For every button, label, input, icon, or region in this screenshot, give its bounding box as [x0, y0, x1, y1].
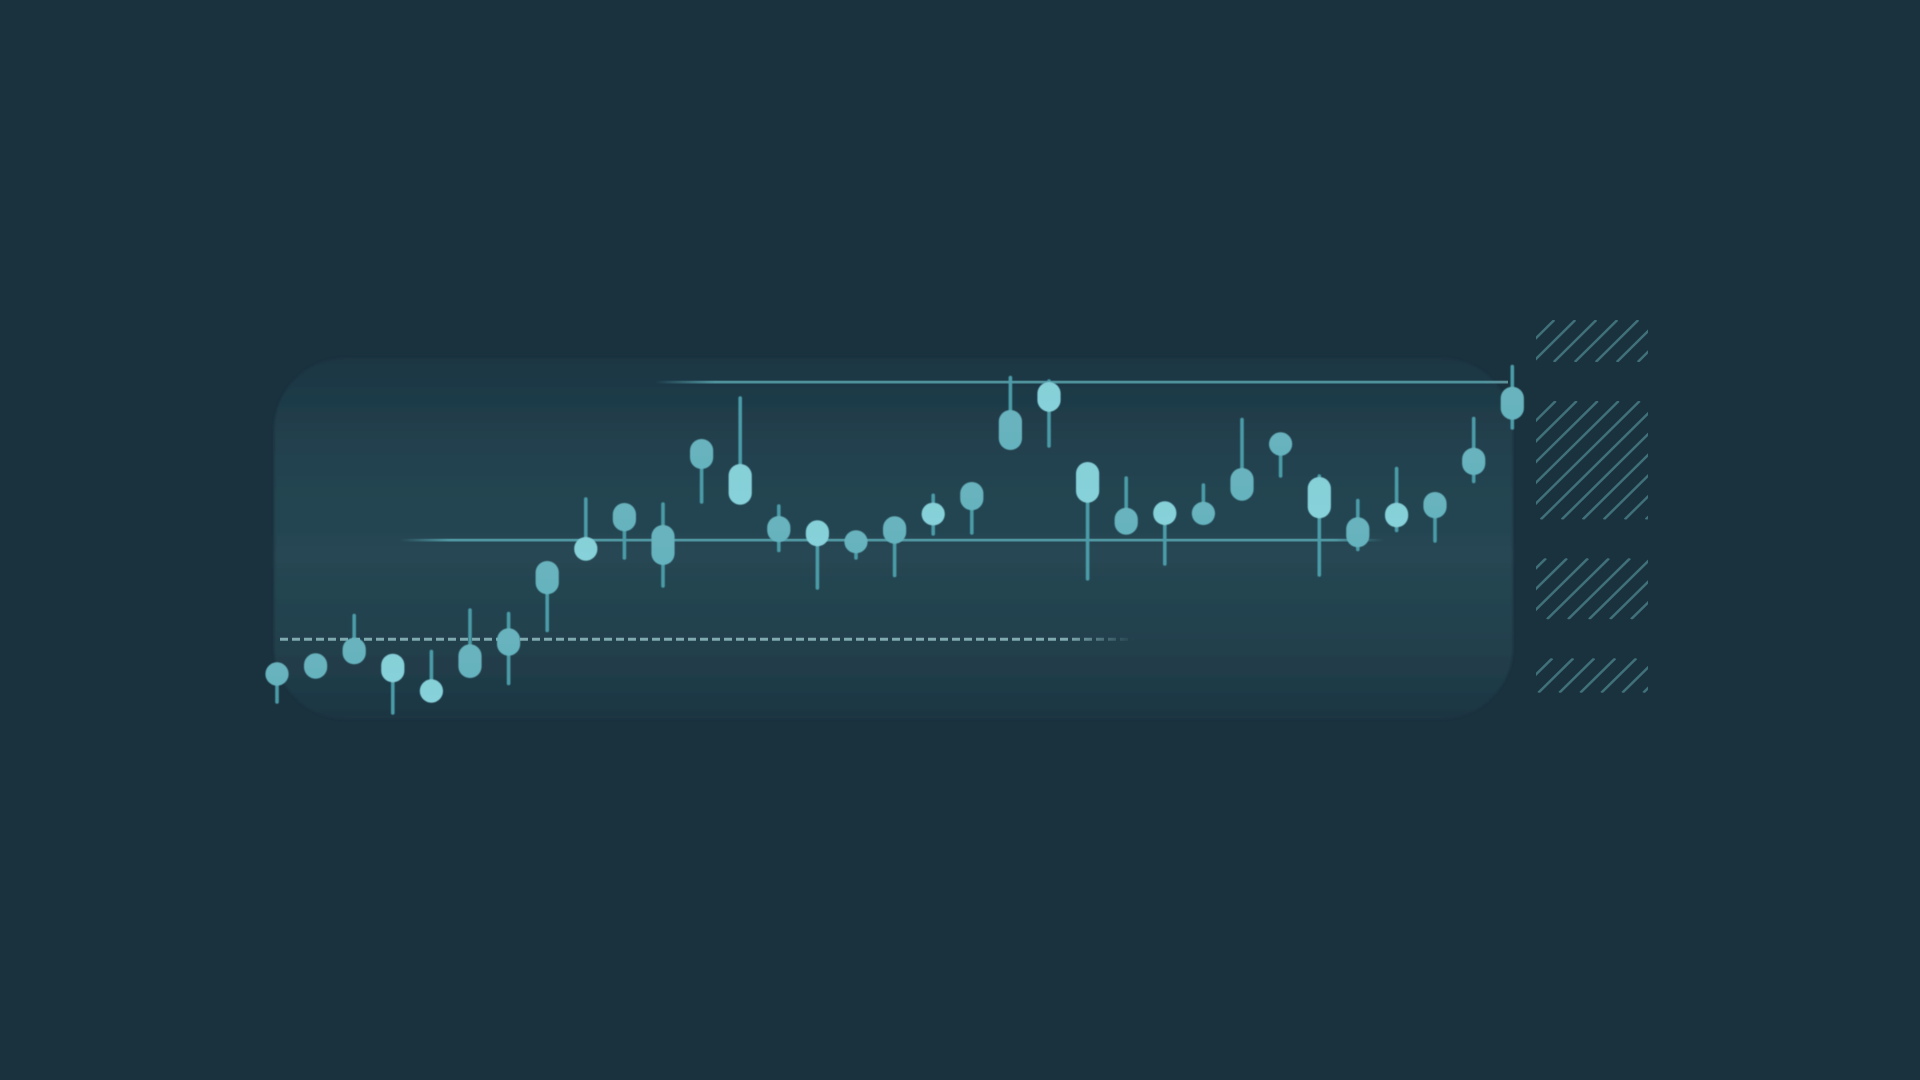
- candle 15: [806, 520, 829, 588]
- hatch block 2: [1536, 401, 1648, 520]
- dashed lower level line: [280, 638, 1134, 641]
- candle 32: [1462, 418, 1485, 482]
- candle 3: [343, 616, 366, 664]
- candle 14: [767, 506, 790, 550]
- candle 7: [497, 614, 520, 684]
- candle 21: [1037, 381, 1061, 446]
- candlestick chart illustration: [264, 320, 1648, 716]
- candle 10: [613, 503, 636, 558]
- candle 12: [690, 439, 713, 502]
- candle 4: [381, 654, 404, 713]
- hatch block 1: [1536, 320, 1648, 362]
- hatch block 3: [1536, 558, 1648, 620]
- panel: chart backdrop: [274, 358, 1513, 719]
- candle 17: [883, 516, 906, 576]
- candle 16: [844, 530, 868, 558]
- candle 28: [1308, 476, 1331, 575]
- candle 27: [1269, 432, 1292, 476]
- candle 29: [1346, 500, 1369, 550]
- candle 33: [1501, 366, 1524, 428]
- upper horizontal level line: [655, 381, 1508, 384]
- candle 8: [536, 561, 559, 630]
- candle 24: [1153, 501, 1176, 564]
- candle 20: [999, 378, 1022, 450]
- hatch block 4: [1536, 658, 1648, 693]
- candle 26: [1230, 420, 1254, 501]
- candle 6: [458, 610, 482, 678]
- candle 11: [651, 504, 675, 586]
- candle 13: [729, 398, 752, 505]
- candle 25: [1192, 485, 1215, 525]
- candle 31: [1423, 492, 1447, 541]
- candle 1: [265, 662, 289, 702]
- candle 18: [922, 495, 945, 534]
- candle 5: [420, 652, 443, 703]
- candle 23: [1115, 478, 1138, 535]
- candle 2: [304, 653, 327, 679]
- candlesticks: [265, 366, 1524, 713]
- candle 19: [960, 482, 983, 533]
- candle 9: [574, 499, 597, 561]
- middle horizontal level line: [400, 539, 1384, 542]
- candle 30: [1385, 468, 1408, 530]
- hatched blocks: [1536, 320, 1648, 693]
- candle 22: [1076, 462, 1099, 579]
